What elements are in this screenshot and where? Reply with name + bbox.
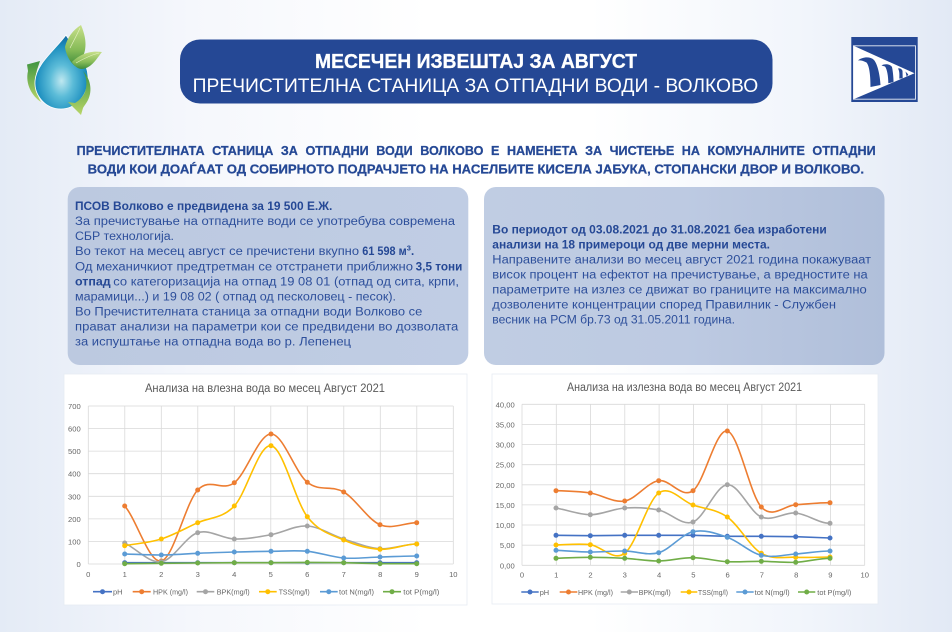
x axis labels: 7 — [342, 570, 346, 579]
x axis labels: 6 — [305, 570, 309, 579]
panel text block: висок процент на ефектот на пречистување, а вредностите на — [492, 270, 868, 282]
chart legend: BPK(mg/l) — [639, 588, 671, 597]
chart legend: pH — [540, 588, 549, 597]
title line: МЕСЕЧЕН ИЗВЕШТАЈ ЗА АВГУСТ — [315, 51, 637, 73]
x axis labels: 1 — [123, 570, 127, 579]
series: tot P — [125, 562, 417, 564]
panel text block — [75, 201, 462, 349]
x axis labels: 7 — [760, 570, 764, 580]
x axis labels — [520, 570, 869, 580]
x axis labels: 3 — [196, 570, 200, 579]
y axis labels: 200 — [68, 515, 81, 524]
x axis labels: 1 — [554, 570, 558, 580]
subtitle line: ПРЕЧИСТИТЕЛНА СТАНИЦА ЗА ОТПАДНИ ВОДИ - ВОЛКОВО — [193, 76, 758, 97]
y axis labels: 20,00 — [496, 481, 515, 490]
x axis labels: 8 — [378, 570, 382, 579]
y axis labels: 30,00 — [496, 440, 515, 450]
x axis labels: 10 — [449, 570, 458, 579]
series: TSS — [556, 491, 830, 558]
y axis labels: 0 — [76, 560, 81, 569]
plot grid — [88, 406, 453, 564]
panel text block: ПСОВ Волково е предвидена за 19 500 Е.Ж. — [75, 201, 332, 213]
chart legend: HPK (mg/l) — [153, 588, 188, 596]
chart legend: tot N(mg/l) — [339, 588, 374, 596]
y axis labels: 5,00 — [500, 541, 515, 550]
chart legend: pH — [113, 588, 122, 596]
y axis labels: 0,00 — [500, 561, 515, 570]
x axis labels: 5 — [691, 570, 696, 580]
x axis labels: 4 — [232, 570, 236, 579]
y axis labels: 10,00 — [496, 521, 515, 530]
chart legend: TSS(mg/l) — [279, 588, 310, 596]
chart legend: BPK(mg/l) — [217, 588, 250, 596]
y axis labels: 600 — [68, 425, 81, 434]
panel: analysis summary — [484, 187, 884, 365]
panel text block: Направените анализи во месец август 2021 година покажуваат — [492, 255, 872, 267]
panel text block: Во периодот од 03.08.2021 до 31.08.2021 беа изработени — [492, 225, 827, 237]
chart legend: tot P(mg/l) — [403, 588, 439, 596]
series: BPK — [556, 485, 830, 523]
x axis labels: 10 — [860, 570, 869, 580]
chart legend — [521, 588, 851, 597]
chart: influent water analysis — [64, 374, 467, 605]
chart legend: tot P(mg/l) — [817, 588, 851, 597]
chart legend: HPK (mg/l) — [578, 588, 613, 597]
y axis labels: 15,00 — [496, 501, 515, 510]
x axis labels: 5 — [269, 570, 273, 579]
series: TSS — [125, 446, 417, 549]
y axis labels — [68, 402, 81, 569]
icon: company logo — [851, 37, 918, 102]
panel text block: За пречистување на отпадните води се употребува современа — [75, 216, 456, 228]
y axis labels: 700 — [68, 402, 81, 411]
series: BPK — [125, 526, 417, 562]
panel text block: со категоризација на отпад 19 08 01 (отпад од сита, крпи, — [113, 276, 459, 288]
panel text block: прават анализи на параметри кои се предвидени во дозволата — [75, 322, 459, 334]
panel text block: параметрите на излез се движат во границите на максимално — [492, 285, 867, 297]
x axis labels: 0 — [86, 570, 90, 579]
x axis labels: 0 — [520, 570, 524, 580]
x axis labels: 2 — [159, 570, 163, 579]
series: pH — [556, 535, 830, 538]
panel text block: за испуштање на отпадна вода во р. Лепенец — [75, 337, 351, 349]
intro heading: ВОДИ КОИ ДОАЃААТ ОД СОБИРНОТО ПОДРАЧЈЕТО НА НАСЕЛБИТЕ КИСЕЛА ЈАБУКА, СТОПАНСКИ ДВОР И ВОЛКОВО. — [88, 161, 864, 176]
y axis labels: 40,00 — [496, 400, 515, 409]
panel text block: дозволените концентрации според Правилник - Службен — [492, 300, 836, 312]
y axis labels: 400 — [68, 470, 81, 479]
panel text block: 3 — [407, 244, 411, 252]
intro heading — [77, 144, 876, 176]
panel text block: отпад — [75, 276, 111, 288]
x axis labels: 9 — [415, 570, 419, 579]
panel text block: марамици...) и 19 08 02 ( отпад од песколовец - песок). — [75, 291, 396, 303]
panel text block: Во текот на месец август се пречистени вкупно — [75, 246, 359, 258]
chart title: Анализа на излезна вода во месец Август 2021 — [567, 382, 802, 394]
series: pH — [125, 562, 417, 564]
plot grid — [522, 404, 865, 565]
panel text block: анализи на 18 примероци од две мерни места. — [492, 240, 770, 252]
x axis labels: 9 — [828, 570, 833, 580]
y axis labels: 35,00 — [496, 420, 515, 429]
panel text block: 3,5 тони — [416, 261, 462, 273]
chart legend: TSS(mg/l) — [698, 588, 728, 597]
panel text block: весник на РСМ бр.73 од 31.05.2011 година. — [492, 315, 735, 327]
intro heading: ПРЕЧИСТИТЕЛНАТА СТАНИЦА ЗА ОТПАДНИ ВОДИ ВОЛКОВО Е НАМЕНЕТА ЗА ЧИСТЕЊЕ НА КОМУНАЛНИТЕ ОТПАДНИ — [77, 144, 876, 158]
panel text block: СБР технологија. — [75, 231, 174, 243]
title banner — [180, 40, 772, 104]
y axis labels: 300 — [68, 492, 81, 501]
y axis labels: 25,00 — [496, 461, 515, 470]
y axis labels — [496, 400, 515, 570]
panel text block: Од механичкиот предтретман се отстранети приближно — [75, 261, 413, 273]
x axis labels: 4 — [657, 570, 661, 580]
y axis labels: 100 — [68, 537, 81, 546]
panel: plant description — [68, 187, 468, 365]
series: tot N — [125, 551, 417, 558]
chart title: Анализа на влезна вода во месец Август 2021 — [145, 383, 385, 395]
x axis labels: 6 — [725, 570, 730, 580]
x axis labels: 2 — [588, 570, 593, 580]
panel text block: 61 598 м — [362, 246, 407, 258]
series: HPK — [125, 434, 417, 561]
chart: effluent water analysis — [492, 374, 878, 604]
x axis labels: 3 — [623, 570, 627, 580]
panel text block: . — [411, 246, 414, 258]
panel text block: Во Пречистителната станица за отпадни води Волково се — [75, 306, 422, 318]
series: tot P — [556, 557, 830, 562]
icon: water drop with leaves and recycling arrows — [27, 25, 102, 115]
chart legend: tot N(mg/l) — [755, 588, 790, 597]
panel text block — [492, 225, 872, 327]
series: tot N — [556, 531, 830, 556]
x axis labels — [86, 570, 458, 579]
y axis labels: 500 — [68, 447, 81, 456]
x axis labels: 8 — [794, 570, 798, 580]
chart legend — [93, 588, 439, 596]
series: HPK — [556, 431, 830, 512]
